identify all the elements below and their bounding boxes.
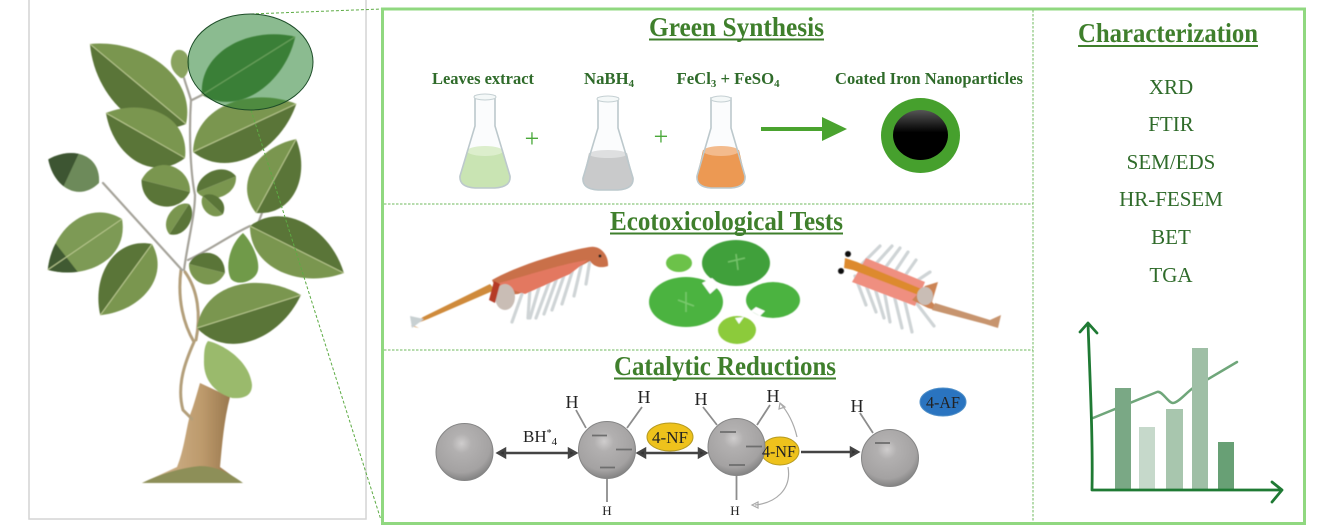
4-AF molecule [920,388,966,416]
particle with hydrides [578,422,636,478]
4-NF label: 4-NF [762,442,796,461]
panel: catalytic reductions [436,351,966,518]
curved arrow down [752,467,789,508]
fruit top [171,50,189,78]
hydrogen labels: H [850,396,864,416]
panel: ecotoxicological tests [410,206,1001,344]
zoom connector lines [251,9,381,520]
arrow: product [801,448,858,456]
bars [1115,348,1234,489]
curved arrow up [779,403,797,437]
hydrogen labels: H [638,387,650,407]
nanoparticle [881,98,960,173]
plant illustration [47,34,344,484]
heading: characterization: Characterization [1078,18,1258,48]
plus sign: + [654,122,668,151]
technique list: BET [1151,225,1191,249]
leaf 7 [48,152,100,193]
hydrogen labels: H [566,392,578,412]
panel dividers [384,10,1033,522]
technique list: TGA [1149,263,1193,287]
hydrogen labels: H [730,503,740,518]
technique list: FTIR [1148,112,1194,136]
fruit middle [228,233,258,283]
ground mound [142,466,243,483]
trunk [142,383,242,483]
flask: leaves extract [460,94,510,188]
highlight ellipse [188,14,313,110]
label: leaves extract: Leaves extract [432,69,534,88]
hydrogen labels: H [602,503,612,518]
hydrogen labels: H [694,389,708,409]
label: FeCl3 + FeSO4: 3 [711,78,717,90]
particle with adsorbed 4-NF [708,418,765,476]
flask: NaBH4 [583,96,633,190]
label: NaBH4: 4 [629,78,634,90]
second 4-NF molecule [761,437,799,465]
hydrogen labels [566,386,864,518]
leaf 8 [47,212,124,274]
particle with one hydride [862,430,918,486]
heading: ecotoxicological tests: Ecotoxicological Tests [610,206,843,236]
leaf 6 [238,202,356,297]
plus sign: + [525,124,539,153]
double arrow: 4-NF [638,449,706,457]
label: BH4: BH [523,427,547,446]
bare particle [436,424,493,480]
label: FeCl3 + FeSO4: FeCl [676,69,711,88]
4-AF molecule: 4-AF [926,393,960,412]
label: coated iron nanoparticles: Coated Iron Nanoparticles [835,69,1023,88]
bonds [576,405,873,502]
axes [1080,323,1282,502]
icon: duckweed [649,240,800,344]
4-NF molecule between particles [647,423,693,451]
leaf 3 [181,78,308,178]
label: FeCl3 + FeSO4: + FeSO [716,69,774,88]
main frame [382,9,1304,524]
fruit large [204,341,252,398]
trend line [1093,362,1237,418]
technique list: HR-FESEM [1119,187,1223,211]
4-NF molecule between particles: 4-NF [652,428,688,447]
label: NaBH4: NaBH [584,69,629,88]
small leaf cluster [136,160,241,288]
double arrow: BH4 [498,449,576,457]
stems [103,78,262,419]
leaf 5 [235,128,317,225]
label: BH4: * [547,428,552,439]
leaf 2 [93,89,198,181]
leaf 4 highlighted [188,14,310,118]
label: FeCl3 + FeSO4: 4 [774,78,780,90]
heading: green synthesis: Green Synthesis [649,12,824,42]
technique list: SEM/EDS [1127,150,1215,174]
panel: green synthesis [432,12,1023,190]
flask: FeCl3 + FeSO4 [697,96,745,188]
panel: plant illustration frame [29,0,366,519]
chart [1080,323,1282,502]
technique list: XRD [1149,75,1193,99]
heading: catalytic reductions: Catalytic Reductions [614,351,836,381]
arrow: synthesis product [761,117,847,141]
hydrogen labels: H [766,386,780,406]
technique list [1119,75,1223,287]
label: BH4: 4 [552,436,558,448]
panel: characterization [1078,18,1282,502]
icon: artemia top view [838,246,1001,332]
leaf 1 [70,21,205,147]
leaf 9 [81,230,172,329]
icon: artemia side view [410,247,608,328]
leaf 15 [188,268,310,355]
